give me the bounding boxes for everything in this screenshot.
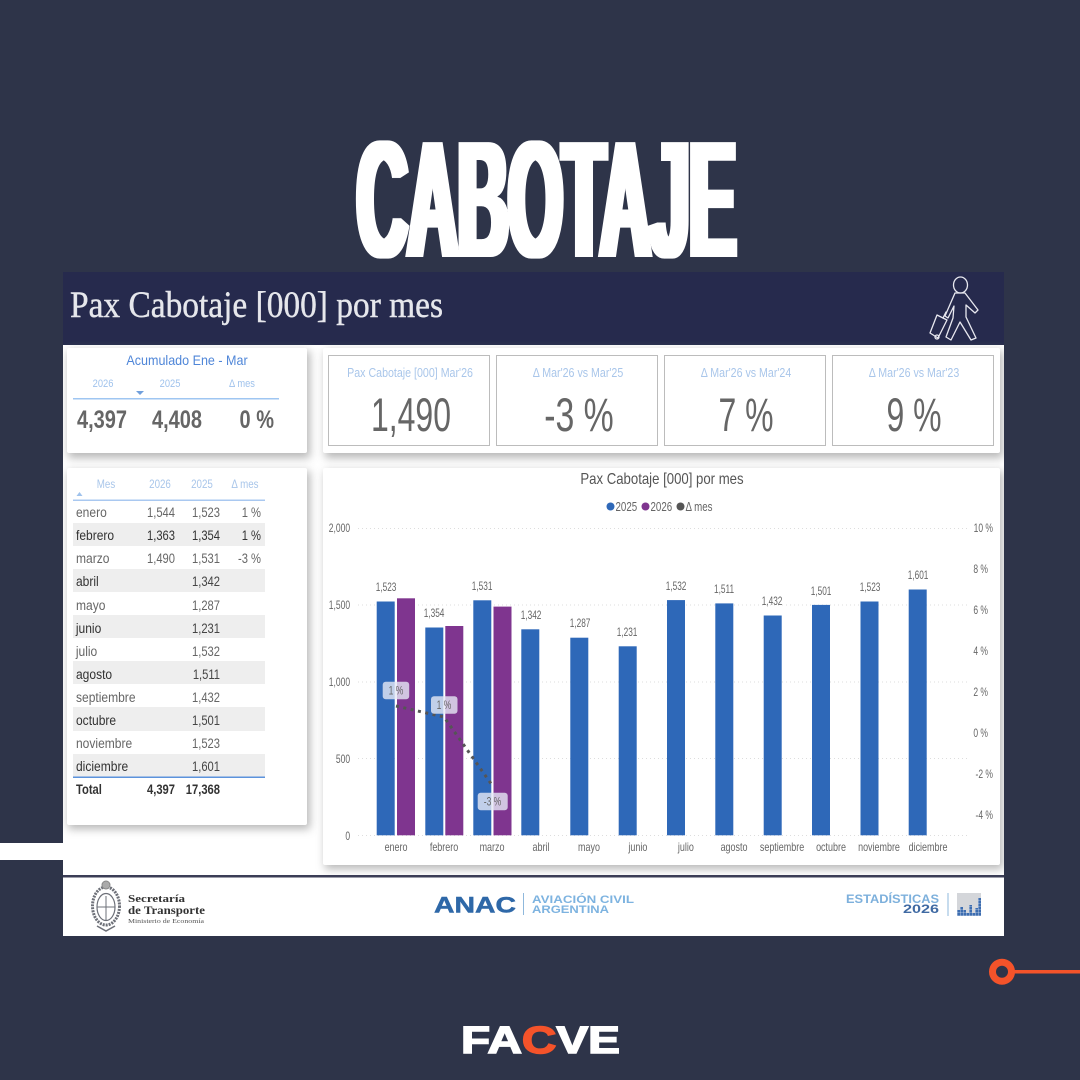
left axis: 0: [345, 831, 350, 843]
dashboard: [63, 272, 1004, 936]
month axis: [385, 842, 948, 854]
month axis: marzo: [480, 842, 505, 854]
table rows: marzo: [76, 550, 109, 566]
KPI: passengers: Pax Cabotaje [000] Mar'26: [347, 365, 473, 380]
right axis: 10 %: [974, 523, 993, 535]
KPI: vs Mar 24: [664, 356, 826, 446]
chart legend: Δ mes: [685, 501, 713, 514]
delta labels: [383, 682, 508, 810]
table header: [73, 478, 265, 501]
KPI: passengers: 1,490: [371, 389, 451, 442]
bar value labels: 1,287: [570, 618, 591, 630]
table rows: 1,523: [192, 736, 220, 751]
table rows: enero: [76, 504, 107, 520]
bar value labels: 1,601: [908, 570, 929, 582]
Secretaria de Transporte: Secretaría: [128, 893, 186, 905]
table rows: 1,511: [193, 667, 220, 682]
delta labels: -3 %: [484, 796, 501, 809]
delta line: [396, 706, 492, 785]
bar value labels: 1,354: [424, 608, 445, 620]
Estadisticas label: [846, 893, 948, 916]
table rows: 1,354: [192, 528, 220, 543]
footer: [92, 881, 981, 931]
table rows: octubre: [76, 712, 116, 728]
table rows: junio: [75, 620, 101, 636]
KPI: vs Mar 24: 7 %: [718, 389, 774, 442]
table rows: 1,531: [192, 551, 220, 566]
Secretaria de Transporte: [128, 893, 205, 925]
right axis: [973, 523, 993, 822]
panel: monthly table: [67, 468, 310, 829]
month axis: agosto: [721, 842, 748, 854]
table header: 2025: [191, 478, 213, 491]
bar value labels: 1,501: [811, 586, 832, 598]
table total: [76, 782, 220, 797]
bars 2026: [397, 598, 512, 835]
accumulated column headers: 2025: [160, 378, 181, 390]
table rows: 1 %: [242, 505, 261, 520]
Secretaria de Transporte: de Transporte: [128, 905, 205, 917]
table rows: 1,544: [147, 505, 175, 520]
FACVE logo: FA CVE: [461, 1020, 620, 1062]
accumulated heading: Acumulado Ene - Mar: [126, 353, 248, 368]
bar value labels: 1,523: [860, 582, 881, 594]
panel: accumulated: [67, 348, 310, 458]
KPI: vs Mar 23: [832, 356, 994, 446]
chart legend: 2026: [650, 501, 672, 514]
Secretaria de Transporte: Ministerio de Economía: [128, 918, 204, 925]
right axis: 6 %: [973, 605, 988, 617]
chart heading: Pax Cabotaje [000] por mes: [580, 471, 744, 488]
right axis: 4 %: [973, 646, 988, 658]
icon: traveler with suitcase: [930, 277, 978, 340]
table header: 2026: [149, 478, 171, 491]
table rows: 1,523: [192, 505, 220, 520]
table rows: 1,490: [147, 551, 175, 566]
header band: [63, 272, 1004, 345]
accumulated values: [77, 406, 274, 434]
KPI: vs Mar 25: -3 %: [544, 389, 614, 441]
right axis: 0 %: [973, 728, 988, 740]
dashboard heading: Pax Cabotaje [000] por mes: [70, 285, 443, 326]
table rows: 1,501: [192, 713, 220, 728]
table rows: noviembre: [76, 735, 132, 751]
table rows: 1,342: [192, 574, 220, 589]
table header: Δ mes: [231, 478, 259, 491]
table rows: 1,363: [147, 528, 175, 543]
chart legend: [606, 501, 713, 514]
accumulated values: 0 %: [240, 406, 274, 434]
table rows: diciembre: [76, 758, 128, 774]
table rows: 1,432: [192, 690, 220, 705]
ANAC logo: ANAC: [434, 892, 516, 918]
accumulated column headers: [93, 378, 255, 390]
left axis: 500: [336, 754, 350, 766]
right axis: -4 %: [976, 810, 993, 822]
month axis: mayo: [578, 842, 600, 854]
accumulated values: 4,408: [152, 406, 202, 434]
bar value labels: 1,432: [762, 596, 783, 608]
KPI: vs Mar 23: Δ Mar'26 vs Mar'23: [869, 365, 960, 380]
month axis: octubre: [816, 842, 846, 854]
bar value labels: 1,342: [521, 610, 542, 622]
KPI: vs Mar 25: Δ Mar'26 vs Mar'25: [533, 365, 624, 380]
month axis: septiembre: [760, 842, 804, 854]
table total: 17,368: [186, 782, 220, 797]
table total: 4,397: [147, 782, 175, 797]
ANAC logo: AVIACIÓN CIVIL: [532, 893, 634, 906]
table total: Total: [76, 782, 102, 797]
month axis: julio: [677, 842, 694, 854]
table rows: septiembre: [76, 689, 136, 705]
table rows: [75, 504, 261, 774]
month axis: abril: [533, 842, 549, 854]
ANAC logo: [434, 892, 634, 918]
table rows: agosto: [76, 666, 112, 682]
table rows: 1,532: [192, 644, 220, 659]
orange connector: [992, 962, 1080, 981]
delta labels: 1 %: [437, 700, 451, 712]
KPI: vs Mar 23: 9 %: [886, 389, 942, 442]
KPI: vs Mar 25: [496, 356, 658, 446]
icon: statistics grid: [957, 893, 981, 916]
panel: KPI strip: [323, 348, 1003, 458]
bar value labels: [376, 570, 929, 639]
delta labels: 1 %: [389, 685, 403, 698]
table rows: abril: [76, 573, 99, 589]
bar value labels: 1,511: [714, 584, 734, 596]
KPI: vs Mar 24: Δ Mar'26 vs Mar'24: [701, 365, 792, 380]
month axis: diciembre: [909, 842, 948, 854]
table header: Mes: [97, 478, 115, 491]
KPI: passengers: [328, 356, 490, 446]
panel: bar chart: [323, 468, 1003, 869]
left axis: 1,500: [329, 600, 350, 612]
month axis: febrero: [430, 842, 458, 854]
bar value labels: 1,531: [472, 581, 493, 593]
table rows: 1 %: [242, 528, 261, 543]
right axis: 2 %: [973, 687, 988, 699]
chart legend: 2025: [615, 501, 637, 514]
Estadisticas label: ESTADÍSTICAS: [846, 893, 939, 906]
table rows: 1,287: [192, 598, 220, 613]
accumulated values: 4,397: [77, 406, 127, 434]
left axis: [329, 523, 350, 843]
Estadisticas label: 2026: [903, 902, 939, 916]
table rows: -3 %: [238, 551, 261, 566]
month axis: enero: [385, 842, 408, 854]
decorative white bar at left edge: [0, 843, 63, 860]
right axis: -2 %: [976, 769, 993, 781]
right axis: 8 %: [973, 564, 988, 576]
month axis: noviembre: [858, 842, 900, 854]
bar value labels: 1,231: [617, 627, 638, 639]
left axis: 1,000: [329, 677, 350, 689]
icon: national emblem: [92, 881, 120, 931]
table rows: 1,601: [192, 759, 220, 774]
bars 2025: [377, 590, 927, 835]
ANAC logo: ARGENTINA: [532, 904, 609, 916]
table rows: julio: [75, 643, 97, 659]
left axis: 2,000: [329, 523, 350, 535]
bar value labels: 1,532: [666, 581, 687, 593]
table rows: 1,231: [192, 621, 220, 636]
table rows: mayo: [76, 597, 105, 613]
bar value labels: 1,523: [376, 582, 397, 594]
table rows: febrero: [76, 527, 114, 543]
month axis: junio: [628, 842, 648, 854]
accumulated column headers: Δ mes: [229, 378, 255, 390]
grid lines: [358, 528, 967, 836]
accumulated column headers: 2026: [93, 378, 114, 390]
